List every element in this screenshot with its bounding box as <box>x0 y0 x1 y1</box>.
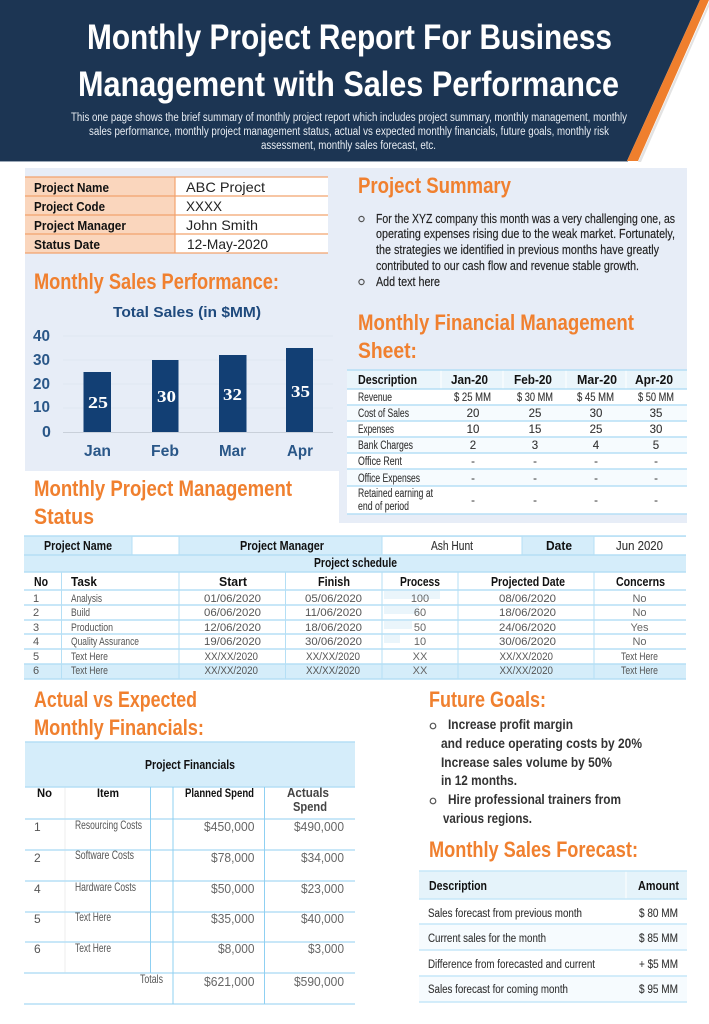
future goals text: Increase profit margin <box>448 717 573 732</box>
schedule rows: 6 <box>33 665 39 677</box>
heading: project summary: Project Summary <box>358 173 512 198</box>
sales forecast table: Sales forecast for coming month <box>428 984 568 996</box>
financial management table: Revenue <box>358 392 392 404</box>
schedule rows: 24/06/2020 <box>499 622 556 634</box>
project status table: Task <box>71 575 97 589</box>
header banner <box>0 0 709 162</box>
bar chart: total sales: Feb <box>151 443 179 460</box>
bar chart: total sales: Apr <box>287 443 313 460</box>
financial management table: Cost of Sales <box>358 408 409 420</box>
project financials table: $490,000 <box>294 819 344 834</box>
schedule rows: 2 <box>33 607 39 619</box>
project summary text: contributed to our cash flow and revenue stable growth. <box>376 259 639 273</box>
project info table: Project Name <box>34 181 109 195</box>
schedule rows: Analysis <box>71 593 102 605</box>
schedule rows: 01/06/2020 <box>204 593 261 605</box>
bar chart: total sales: 35 <box>291 382 310 401</box>
schedule rows: 10 <box>414 636 426 648</box>
financial management table: - <box>594 495 598 507</box>
financial management table: Apr-20 <box>635 373 673 387</box>
financial management table: $ 45 MM <box>577 392 614 404</box>
project financials table: Project Financials <box>145 758 235 772</box>
future goals text <box>430 717 642 826</box>
project financials table: $450,000 <box>204 819 254 834</box>
project status table: Process <box>400 575 440 589</box>
schedule rows: 18/06/2020 <box>305 622 362 634</box>
sales forecast table: Current sales for the month <box>428 933 546 945</box>
project financials table: $40,000 <box>301 911 344 926</box>
financial management table: 35 <box>650 408 662 420</box>
heading: actual vs expected monthly financials: Actual vs Expected <box>34 687 197 712</box>
financial management table: 10 <box>467 424 479 436</box>
project financials table: $3,000 <box>308 941 344 956</box>
schedule rows: XX <box>413 651 428 663</box>
project status table: Finish <box>318 575 350 589</box>
financial management table: - <box>533 473 537 485</box>
project financials table: Text Here <box>75 941 111 955</box>
project status table: Project Manager <box>240 539 324 553</box>
schedule rows: Quality Assurance <box>71 636 139 648</box>
financial management table: Office Rent <box>358 456 403 468</box>
financial management table: Office Expenses <box>358 473 420 485</box>
project status table: Projected Date <box>491 575 565 589</box>
heading: actual vs expected monthly financials: Monthly Financials: <box>34 715 204 740</box>
sales forecast table: $ 95 MM <box>639 984 678 996</box>
financial management table: $ 30 MM <box>517 392 553 404</box>
schedule rows: 50 <box>414 622 426 634</box>
project financials table: 4 <box>34 882 41 896</box>
financial management table: Expenses <box>358 424 394 436</box>
bar chart: total sales: 40 <box>33 328 50 345</box>
schedule rows: 06/06/2020 <box>204 607 261 619</box>
project info table: Status Date <box>34 238 100 252</box>
financial management table: - <box>471 456 475 468</box>
subtitle: sales performance, monthly project management status, actual vs expected monthly financials, future goals, monthly risk <box>89 126 609 138</box>
bar chart: total sales: 25 <box>88 393 108 412</box>
sales forecast table: Difference from forecasted and current <box>428 959 596 971</box>
project info table: Project Manager <box>34 219 126 233</box>
schedule rows: XX/XX/2020 <box>500 665 553 677</box>
project info table: ABC Project <box>186 179 265 195</box>
project info table: 12-May-2020 <box>187 236 268 252</box>
schedule rows: Text Here <box>71 665 108 677</box>
project financials table: $34,000 <box>301 850 344 865</box>
heading: monthly financial management sheet <box>358 310 635 363</box>
schedule rows: XX/XX/2020 <box>306 665 360 677</box>
schedule rows: 5 <box>33 651 39 663</box>
future goals text: various regions. <box>443 811 532 826</box>
chart title: Total Sales (in $MM) <box>113 304 261 321</box>
project info table: XXXX <box>186 198 223 214</box>
schedule rows: 08/06/2020 <box>499 593 556 605</box>
project financials table: Planned Spend <box>185 786 254 800</box>
project financials table: $78,000 <box>211 850 254 865</box>
bar chart: total sales: 20 <box>33 376 50 393</box>
financial management table: $ 25 MM <box>454 392 491 404</box>
bar chart: total sales <box>33 304 333 460</box>
schedule rows: XX <box>413 665 428 677</box>
project financials table: Spend <box>293 799 327 814</box>
project financials table: Hardware Costs <box>75 880 136 894</box>
financial management table: - <box>471 473 475 485</box>
title <box>78 18 619 104</box>
heading: future goals: Future Goals: <box>429 687 546 712</box>
schedule rows: Text Here <box>621 651 658 663</box>
heading: monthly financial management sheet: Sheet: <box>358 338 417 363</box>
project summary text <box>359 212 675 289</box>
schedule rows: 60 <box>414 607 426 619</box>
project info table <box>25 177 328 253</box>
schedule rows: No <box>632 593 647 605</box>
project financials table: Resourcing Costs <box>75 818 142 832</box>
heading: monthly sales performance: Monthly Sales Performance: <box>34 269 279 294</box>
schedule rows: 100 <box>411 593 429 605</box>
financial management table: - <box>654 473 658 485</box>
schedule rows: 18/06/2020 <box>499 607 556 619</box>
project status table: Concerns <box>616 575 665 589</box>
schedule rows: Production <box>71 622 113 634</box>
heading: actual vs expected monthly financials <box>34 687 204 740</box>
subtitle: assessment, monthly sales forecast, etc. <box>261 140 436 152</box>
financial management table: 5 <box>653 440 659 452</box>
financial management table: 15 <box>529 424 541 436</box>
project financials table: Totals <box>140 972 163 986</box>
title: Monthly Project Report For Business <box>87 18 612 57</box>
project financials table: Software Costs <box>75 848 134 862</box>
bar chart: total sales: 10 <box>33 399 50 416</box>
bar chart: total sales: Mar <box>219 443 246 460</box>
financial management table: 25 <box>529 408 541 420</box>
financial management table: - <box>533 495 537 507</box>
project financials table: 6 <box>34 942 41 956</box>
schedule rows: XX/XX/2020 <box>204 651 258 663</box>
project status table <box>24 536 686 679</box>
project financials table: No <box>37 786 52 800</box>
project financials table: 2 <box>34 851 41 865</box>
project summary text: Add text here <box>376 275 440 289</box>
financial management table: Mar-20 <box>577 373 617 387</box>
schedule rows: XX/XX/2020 <box>306 651 360 663</box>
financial management table: Jan-20 <box>451 373 488 387</box>
financial management table: - <box>471 495 475 507</box>
schedule rows: Yes <box>631 622 649 634</box>
financial management table: 3 <box>532 440 538 452</box>
bar chart: total sales: 0 <box>42 424 51 441</box>
financial management table: 25 <box>590 424 602 436</box>
project financials table: $50,000 <box>211 881 254 896</box>
financial management table: $ 50 MM <box>638 392 674 404</box>
financial management table: Feb-20 <box>514 373 552 387</box>
schedule rows: XX/XX/2020 <box>204 665 258 677</box>
project financials table: 5 <box>34 912 41 926</box>
project financials table: $8,000 <box>218 941 254 956</box>
project info table: Project Code <box>34 200 105 214</box>
schedule rows: 11/06/2020 <box>305 607 362 619</box>
schedule rows: 1 <box>33 593 39 605</box>
schedule rows <box>33 593 658 677</box>
financial management table <box>347 370 687 514</box>
financial management table: end of period <box>358 501 409 513</box>
financial management table: - <box>533 456 537 468</box>
project financials table: $590,000 <box>294 974 344 989</box>
heading: monthly financial management sheet: Monthly Financial Management <box>358 310 635 335</box>
heading: monthly project management status: Monthly Project Management <box>34 476 293 501</box>
schedule rows: 30/06/2020 <box>499 636 556 648</box>
project financials table: Item <box>97 786 119 800</box>
financial management table: 30 <box>650 424 662 436</box>
future goals text: Increase sales volume by 50% <box>441 755 612 770</box>
project status table: Project Name <box>44 539 112 553</box>
schedule rows: 30/06/2020 <box>305 636 362 648</box>
project status table: Start <box>219 575 248 589</box>
financial management table: - <box>654 495 658 507</box>
financial management table: 4 <box>593 440 600 452</box>
bar chart: total sales: 32 <box>223 385 242 404</box>
financial management table: - <box>654 456 658 468</box>
project status table: Ash Hunt <box>431 539 473 553</box>
bar chart: total sales: Jan <box>84 443 111 460</box>
schedule rows: Build <box>71 607 90 619</box>
financial management table: 30 <box>590 408 602 420</box>
schedule rows: No <box>632 607 647 619</box>
sales forecast table: Amount <box>638 879 680 893</box>
financial management table: Bank Charges <box>358 440 413 452</box>
background panel <box>25 168 687 523</box>
heading: monthly sales forecast: Monthly Sales Forecast: <box>429 837 638 862</box>
project financials table: $621,000 <box>204 974 254 989</box>
project summary text: the strategies we identified in previous months have greatly <box>376 243 660 257</box>
project financials table: 1 <box>34 820 41 834</box>
bar chart: total sales: 30 <box>157 387 176 406</box>
schedule rows: 05/06/2020 <box>305 593 362 605</box>
project status table: Date <box>546 539 572 553</box>
future goals text: Hire professional trainers from <box>448 792 621 807</box>
project financials table: Actuals <box>287 785 329 800</box>
schedule rows: 12/06/2020 <box>204 622 261 634</box>
schedule rows: No <box>632 636 647 648</box>
financial management table: Retained earning at <box>358 488 434 500</box>
financial management table: - <box>594 456 598 468</box>
sales forecast table: Description <box>429 879 487 893</box>
schedule rows: Text Here <box>71 651 108 663</box>
bar chart: total sales: 30 <box>33 352 50 369</box>
sales forecast table: + $5 MM <box>639 959 678 971</box>
project status table: Jun 2020 <box>616 539 663 553</box>
financial management table: - <box>594 473 598 485</box>
subtitle <box>71 112 627 152</box>
future goals text: and reduce operating costs by 20% <box>441 736 642 751</box>
financial management table: Description <box>358 373 417 387</box>
project financials table <box>24 742 355 1004</box>
project info table: John Smith <box>186 217 258 233</box>
project status table: Project schedule <box>314 556 397 570</box>
schedule rows: 19/06/2020 <box>204 636 261 648</box>
heading: monthly project management status <box>34 476 293 529</box>
schedule rows: 4 <box>33 636 39 648</box>
schedule rows: XX/XX/2020 <box>500 651 553 663</box>
process progress bars <box>384 591 440 643</box>
sales forecast table: $ 80 MM <box>639 908 678 920</box>
financial management table: 2 <box>470 440 476 452</box>
heading: monthly project management status: Status <box>34 504 94 529</box>
title: Management with Sales Performance <box>78 65 619 104</box>
sales forecast table: Sales forecast from previous month <box>428 908 582 920</box>
sales forecast table <box>419 871 687 1002</box>
future goals text: in 12 months. <box>441 773 517 788</box>
project financials table: $23,000 <box>301 881 344 896</box>
schedule rows: Text Here <box>621 665 658 677</box>
project status table: No <box>34 575 48 589</box>
project financials table: Text Here <box>75 910 111 924</box>
schedule rows: 3 <box>33 622 39 634</box>
sales forecast table: $ 85 MM <box>639 933 678 945</box>
project financials table: $35,000 <box>211 911 254 926</box>
financial management table: 20 <box>467 408 479 420</box>
